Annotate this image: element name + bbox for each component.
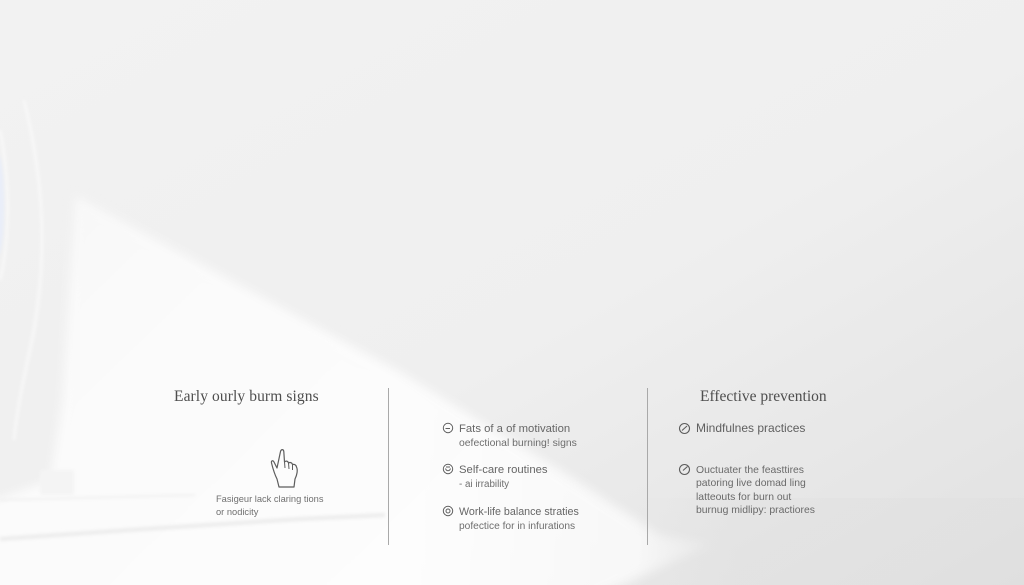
divider: right xyxy=(647,388,648,545)
icon: circle target xyxy=(442,506,454,516)
icon: circle check xyxy=(678,423,690,434)
item: motivation xyxy=(442,422,577,449)
panel: effective prevention xyxy=(678,388,827,516)
text: practices description: burnug midlipy: practiores xyxy=(696,505,815,516)
icon: circle smile xyxy=(442,464,454,474)
heading: effective prevention: Effective prevention xyxy=(700,388,827,405)
item: self-care xyxy=(442,464,548,490)
text: work-life: Work-life balance straties xyxy=(459,506,579,518)
divider: left xyxy=(388,388,389,545)
item: mindfulness xyxy=(678,421,805,435)
icon: circle check xyxy=(678,464,690,475)
item: practices xyxy=(678,464,815,516)
text: practices description xyxy=(696,465,815,516)
text: early sign description: or nodicity xyxy=(216,507,258,517)
text: motivation: Fats of a of motivation xyxy=(459,423,570,435)
text: self-care detail: - ai irrability xyxy=(459,479,509,490)
panel: early burnout signs xyxy=(174,388,324,517)
icon: circle face xyxy=(442,422,454,434)
background: soft light scene xyxy=(0,165,1024,585)
text: practices description: patoring live domad ling xyxy=(696,478,806,489)
item: work-life xyxy=(442,506,579,532)
icon: pointing hand xyxy=(270,449,298,488)
panel: middle list xyxy=(442,422,579,532)
text: mindfulness: Mindfulnes practices xyxy=(696,421,805,435)
text: self-care: Self-care routines xyxy=(459,464,548,476)
text: practices description: latteouts for burn out xyxy=(696,492,791,503)
heading: early signs: Early ourly burm signs xyxy=(174,388,319,405)
text: early sign description xyxy=(216,494,324,517)
text: work-life detail: pofectice for in infurations xyxy=(459,521,575,532)
text: motivation detail: oefectional burning! signs xyxy=(459,438,577,449)
text: early sign description: Fasigeur lack claring tions xyxy=(216,494,323,504)
text: practices description: Ouctuater the feasttires xyxy=(696,465,804,476)
